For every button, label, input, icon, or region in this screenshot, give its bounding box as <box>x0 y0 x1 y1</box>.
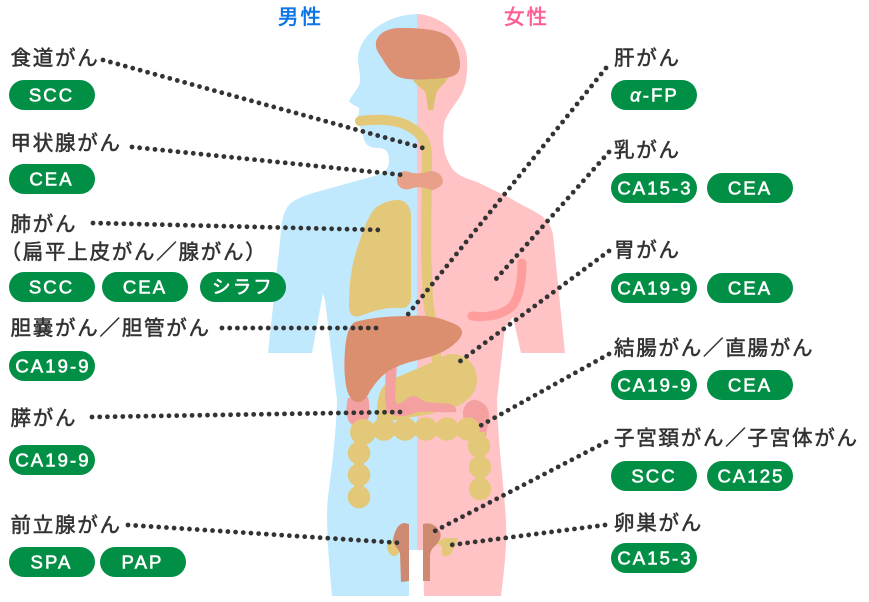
callout line: gallbladder <box>222 326 379 330</box>
label: 卵巣がん <box>614 512 703 535</box>
marker pill: SPA <box>9 547 95 577</box>
callout line: prostate <box>128 525 401 543</box>
marker pill: CA19-9: CA19-9 <box>15 450 91 470</box>
marker pill: CA15-3: CA15-3 <box>617 178 693 198</box>
marker pill: SCC: SCC <box>29 84 74 106</box>
item: prostate cancer <box>9 514 186 577</box>
label: 結腸がん／直腸がん <box>614 337 814 360</box>
item: thyroid cancer <box>9 132 122 194</box>
label: 前立腺がん <box>10 514 122 537</box>
marker pill: cyfra <box>200 272 286 302</box>
marker pill: SCC: SCC <box>631 466 677 486</box>
marker pill: CEA: CEA <box>728 178 772 198</box>
label: 甲状腺がん <box>10 132 122 155</box>
item: ovarian cancer <box>611 512 703 573</box>
organ: lung <box>349 200 411 317</box>
organ: pituitary <box>413 78 448 110</box>
callout line: stomach <box>455 251 609 365</box>
marker pill: CEA <box>102 272 188 302</box>
callout line: ovary <box>451 525 605 545</box>
marker pill: CA125 <box>707 461 793 491</box>
marker pill: SCC <box>611 461 697 491</box>
marker pill: CA125: CA125 <box>717 466 785 486</box>
marker pill: CEA <box>707 173 793 203</box>
marker pill: CEA: CEA <box>728 374 772 396</box>
marker pill: SCC: SCC <box>29 276 74 298</box>
item: lung cancer <box>0 213 286 302</box>
marker pill: CEA <box>707 273 793 303</box>
label: 胃がん <box>614 239 681 262</box>
item: gallbladder and bile duct cancer <box>9 317 211 381</box>
marker pill: cyfra: シラフ <box>212 276 274 298</box>
callout line: esophagus <box>103 60 423 148</box>
organ: stomach <box>377 354 477 422</box>
organ: stomach pink band <box>472 263 522 317</box>
marker pill: CA19-9: CA19-9 <box>617 278 693 298</box>
marker pill: PAP <box>100 547 186 577</box>
sub label: （扁平上皮がん／腺がん） <box>0 241 268 264</box>
callout line: uterus <box>433 442 606 532</box>
item: cervical and uterine cancer <box>611 427 859 491</box>
marker pill: CEA: CEA <box>29 168 74 190</box>
label: 乳がん <box>614 139 681 162</box>
item: liver cancer <box>611 47 697 110</box>
marker pill: CA19-9 <box>611 370 697 400</box>
marker pill: CA19-9 <box>9 351 95 381</box>
item: colon and rectal cancer <box>611 337 814 400</box>
item: stomach cancer <box>611 239 793 303</box>
female half of body <box>417 14 565 596</box>
organ: male reproductive <box>393 523 409 582</box>
marker pill: CEA: CEA <box>123 276 167 298</box>
callout line: pancreas <box>92 412 400 417</box>
label: 子宮頚がん／子宮体がん <box>614 427 859 450</box>
marker pill: PAP: PAP <box>122 552 163 572</box>
male half of body <box>268 14 417 596</box>
marker pill: CEA: CEA <box>728 278 772 298</box>
marker pill: CEA <box>707 370 793 400</box>
organ: esophagus <box>360 120 437 362</box>
label: 食道がん <box>10 47 100 70</box>
heading: female: 女性 <box>504 6 549 29</box>
marker pill: CA19-9: CA19-9 <box>15 356 91 376</box>
organ: liver <box>344 316 462 402</box>
organ: thyroid <box>397 171 443 190</box>
organ: pancreas and bile duct <box>385 362 456 416</box>
marker pill: CA19-9 <box>611 273 697 303</box>
label: 肝がん <box>614 47 681 70</box>
marker pill: SCC <box>9 272 95 302</box>
label: 胆嚢がん／胆管がん <box>10 317 211 340</box>
organ: brain <box>376 28 460 80</box>
marker pill: alpha-FP: α-FP <box>630 84 679 106</box>
item: breast cancer <box>611 139 793 203</box>
callout line: liver <box>405 68 606 318</box>
item: esophageal cancer <box>9 47 100 110</box>
marker pill: CA15-3 <box>611 173 697 203</box>
item: pancreatic cancer <box>9 407 95 475</box>
label: 膵がん <box>10 407 77 430</box>
organ: colon <box>348 417 491 508</box>
callout line: thyroid <box>132 147 403 175</box>
callout line: lung <box>93 223 381 230</box>
marker pill: CA19-9: CA19-9 <box>617 374 693 396</box>
marker pill: CA15-3: CA15-3 <box>617 548 693 568</box>
organ: left kidney <box>346 397 369 427</box>
organ: right kidney <box>463 400 489 436</box>
heading: male: 男性 <box>278 6 323 29</box>
organ: uterus <box>423 523 441 581</box>
callout line: breast <box>496 152 609 279</box>
organ: prostate <box>387 540 400 556</box>
label: 肺がん <box>10 213 77 236</box>
body illustration <box>268 14 565 596</box>
marker pill: SPA: SPA <box>31 552 72 572</box>
callout line: colon <box>478 354 609 427</box>
organ: ovary <box>436 538 458 556</box>
